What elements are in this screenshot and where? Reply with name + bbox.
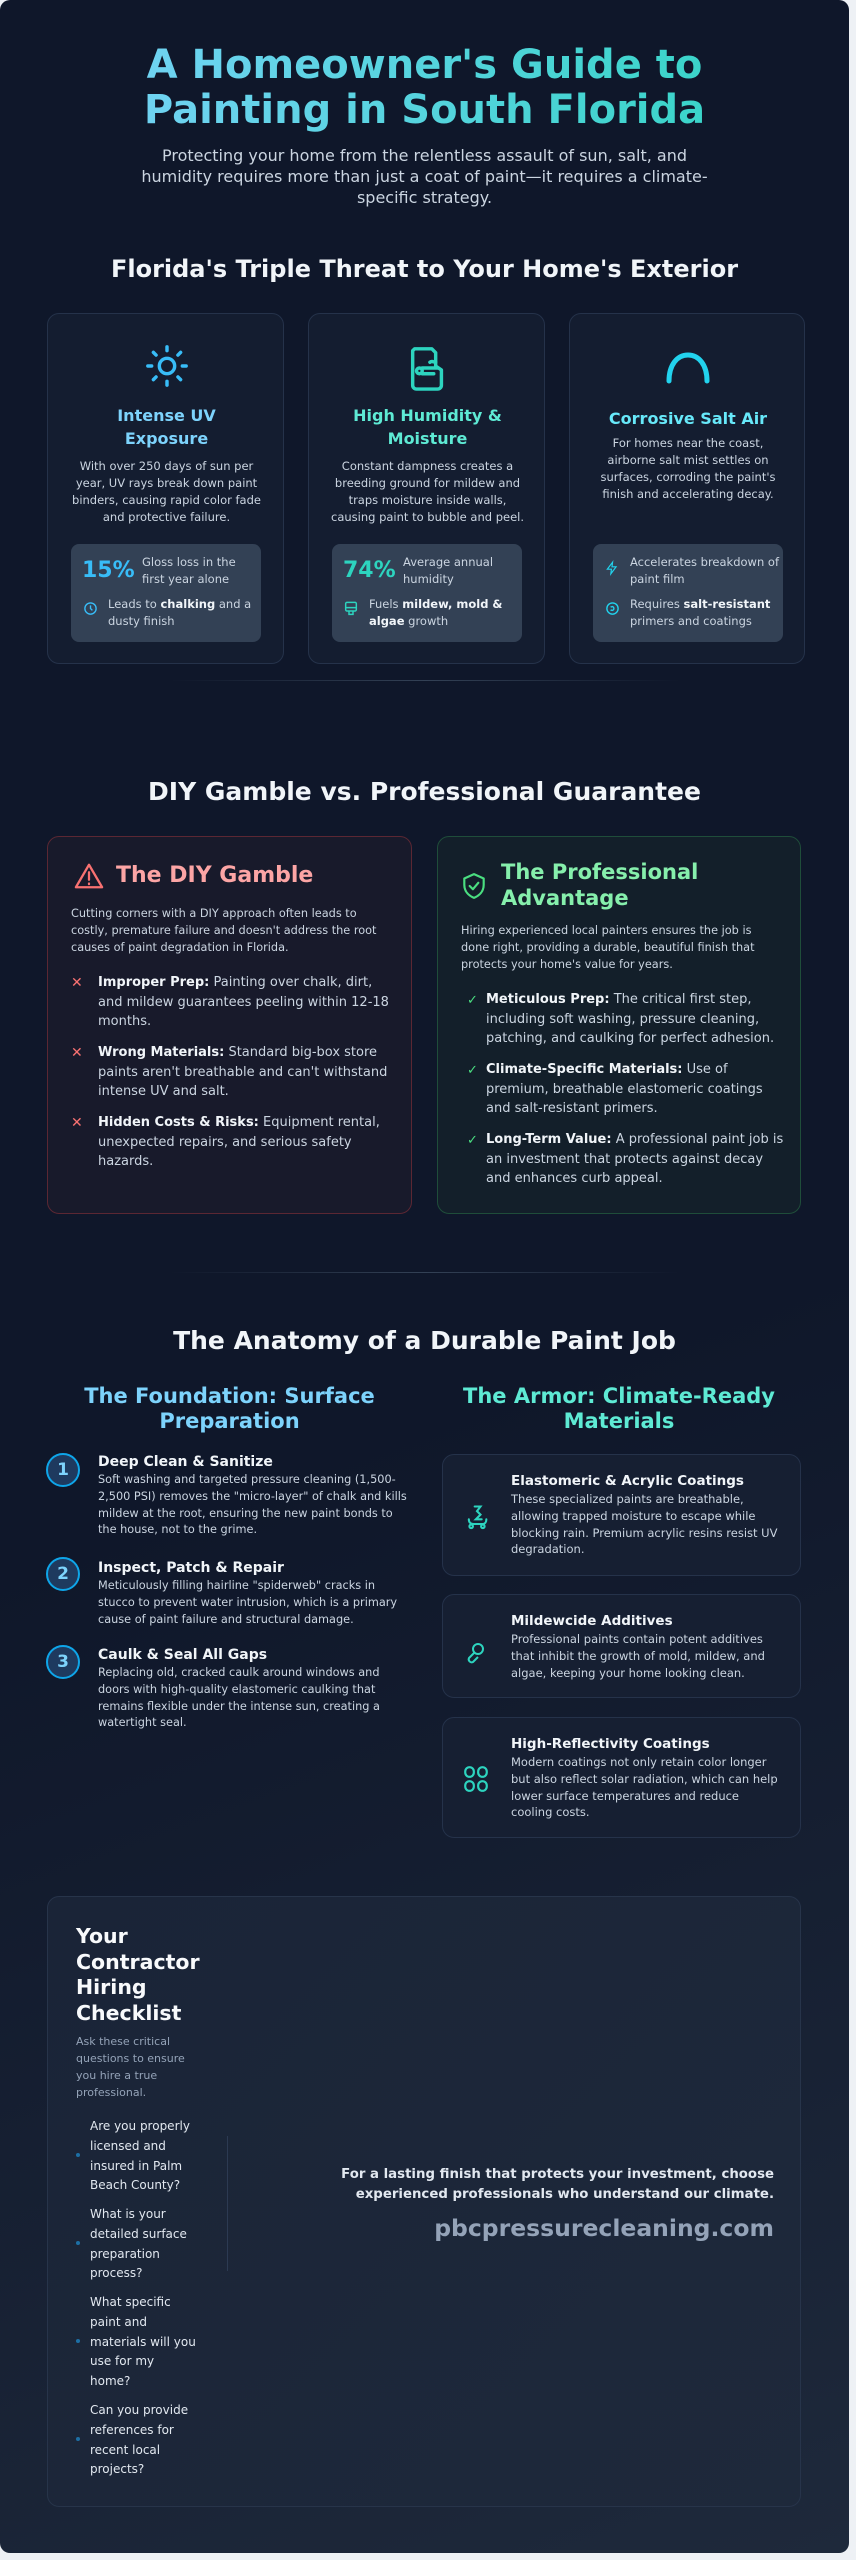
card title: Corrosive Salt Air [609,409,767,428]
checklist items: Are you properly licensed and insured in Palm Beach County? [90,2119,190,2192]
DIY bullets: Improper Prep: Painting over chalk, dirt, and mildew guarantees peeling within 12-18 months. [98,975,389,1029]
DIY bullets: ✕ [71,1115,83,1131]
step 1 [46,1453,407,1536]
panel: salt air [569,313,805,664]
checklist items [76,2119,196,2476]
checklist title: Your Contractor Hiring Checklist [76,1924,200,2025]
checklist items: What is your detailed surface preparation process? [90,2207,187,2280]
step 3: Replacing old, cracked caulk around windows and doors with high-quality elastomeric caulking that remains flexible under the intense sun, creating a watertight seal. [98,1666,380,1729]
pro bullets [467,992,783,1186]
subheading: foundation: The Foundation: Surface Preparation [84,1384,375,1433]
DIY bullets: Hidden Costs & Risks: Equipment rental, unexpected repairs, and serious safety hazards. [98,1115,380,1169]
panel: UV exposure [47,313,284,664]
stat box: Requires salt-resistant primers and coatings [630,597,770,628]
DIY bullets [71,975,389,1169]
material card: reflectivity: High-Reflectivity Coatings [511,1736,710,1752]
panel: humidity [308,313,545,664]
card title: Intense UV [117,406,216,425]
card title: High Humidity & [353,406,502,425]
subtitle: humidity requires more than just a coat of paint—it requires a climate- [141,167,708,186]
DIY bullets: ✕ [71,1045,83,1061]
stat box: Leads to chalking and a dusty finish [108,597,251,628]
subtitle [141,146,708,207]
pro title: The Professional Advantage [501,860,698,910]
step 1: 1 [57,1460,69,1480]
pro intro: Hiring experienced local painters ensures the job is done right, providing a durable, beautiful finish that protects your home's value for years. [461,924,755,971]
step 1: Deep Clean & Sanitize [98,1454,273,1470]
icon: humidity [410,347,444,391]
checklist items: What specific [90,2295,171,2309]
card title: Exposure [125,429,208,448]
subheading: armor: The Armor: Climate-Ready Materials [463,1384,775,1433]
pro bullets: ✓ [467,1063,478,1078]
card text: For homes near the coast, airborne salt mist settles on surfaces, corroding the paint's finish and accelerating decay. [601,436,775,501]
DIY title: The DIY Gamble [116,863,313,888]
material card: elastomeric: Elastomeric & Acrylic Coatings [511,1473,744,1489]
icon: sun [146,345,188,387]
step 2 [46,1557,397,1626]
stat box: 74% [343,558,396,583]
icon: warning [74,864,104,888]
pro bullets: Meticulous Prep: The critical first step, including soft washing, pressure cleaning, patching, and caulking for perfect adhesion. [486,992,774,1046]
material card: reflectivity: Modern coatings not only retain color longer but also reflect solar radiation, which can help lower surface temperatures and reduce cooling costs. [511,1755,778,1819]
stat box [593,544,783,642]
step 2: 2 [57,1564,69,1584]
heading: anatomy: The Anatomy of a Durable Paint Job [173,1326,676,1355]
DIY bullets: ✕ [71,975,83,991]
checklist subtitle: Ask these critical questions to ensure you hire a true professional. [76,2035,185,2099]
stat box: 15% [82,558,135,583]
DIY intro: Cutting corners with a DIY approach often leads to costly, premature failure and doesn't address the root causes of paint degradation in Florida. [71,907,376,954]
heading: DIY vs pro: DIY Gamble vs. Professional Guarantee [148,777,701,806]
panel: DIY gamble [47,836,412,1214]
material card: elastomeric [442,1454,801,1576]
subtitle: specific strategy. [357,188,492,207]
checklist items: Can you provide references for recent local projects? [90,2403,188,2476]
card title [353,406,502,448]
stat box: Average annual humidity [403,555,493,586]
checklist items: materials will you [90,2335,196,2349]
stat box [332,544,522,642]
step 2: Meticulously filling hairline "spiderweb" cracks in stucco to prevent water intrusion, which is a primary cause of paint failure and structural damage. [98,1579,397,1626]
pro bullets: ✓ [467,993,478,1008]
step 1: Soft washing and targeted pressure cleaning (1,500-2,500 PSI) removes the "micro-layer" of chalk and kills mildew at the root, ensuring the new paint bonds to the house, not to the grime. [98,1473,407,1536]
step 3: 3 [57,1652,69,1672]
icon: salt arc [666,352,710,384]
card title: Moisture [388,429,467,448]
card text: Constant dampness creates a breeding ground for mildew and traps moisture inside walls, causing paint to bubble and peel. [331,459,524,524]
checklist items: paint and [90,2315,147,2329]
card title [117,406,216,448]
website: pbcpressurecleaning.com [434,2214,774,2242]
stat box: Fuels mildew, mold & algae growth [369,597,502,628]
panel: checklist [47,1896,801,2507]
subtitle: Protecting your home from the relentless assault of sun, salt, and [162,146,687,165]
step 3 [46,1645,380,1729]
pro bullets: ✓ [467,1133,478,1148]
stat box [71,544,261,642]
DIY bullets: Wrong Materials: Standard big-box store paints aren't breathable and can't withstand intense UV and salt. [98,1045,387,1099]
panel: professional advantage [437,836,801,1214]
material card: mildewcide: Professional paints contain potent additives that inhibit the growth of mold, mildew, and algae, keeping your home looking clean. [511,1632,765,1680]
card text: With over 250 days of sun per year, UV rays break down paint binders, causing rapid color fade and protective failure. [72,459,261,524]
step 2: Inspect, Patch & Repair [98,1560,284,1576]
step 3: Caulk & Seal All Gaps [98,1647,267,1663]
material card: mildewcide [442,1594,801,1698]
stat box: Gloss loss in the first year alone [142,555,236,586]
heading: triple threat: Florida's Triple Threat to Your Home's Exterior [111,255,738,283]
stat box: Accelerates breakdown of paint film [630,555,779,586]
checklist items: home? [90,2374,130,2388]
material card: reflectivity [442,1717,801,1838]
title [0,43,849,133]
title: A Homeowner's Guide to [147,42,702,88]
material card: elastomeric: These specialized paints are breathable, allowing trapped moisture to escape while blocking rain. Premium acrylic resins resist UV degradation. [511,1492,777,1556]
call to action: For a lasting finish that protects your investment, choose experienced professionals who understand our climate. [341,2167,774,2202]
checklist items: use for my [90,2354,154,2368]
material card: mildewcide: Mildewcide Additives [511,1613,673,1629]
pro bullets: Climate-Specific Materials: Use of premium, breathable elastomeric coatings and salt-resistant primers. [486,1062,763,1116]
icon: shield [463,873,485,899]
title: Painting in South Florida [144,87,705,133]
pro bullets: Long-Term Value: A professional paint job is an investment that protects against decay and enhances curb appeal. [486,1132,783,1186]
